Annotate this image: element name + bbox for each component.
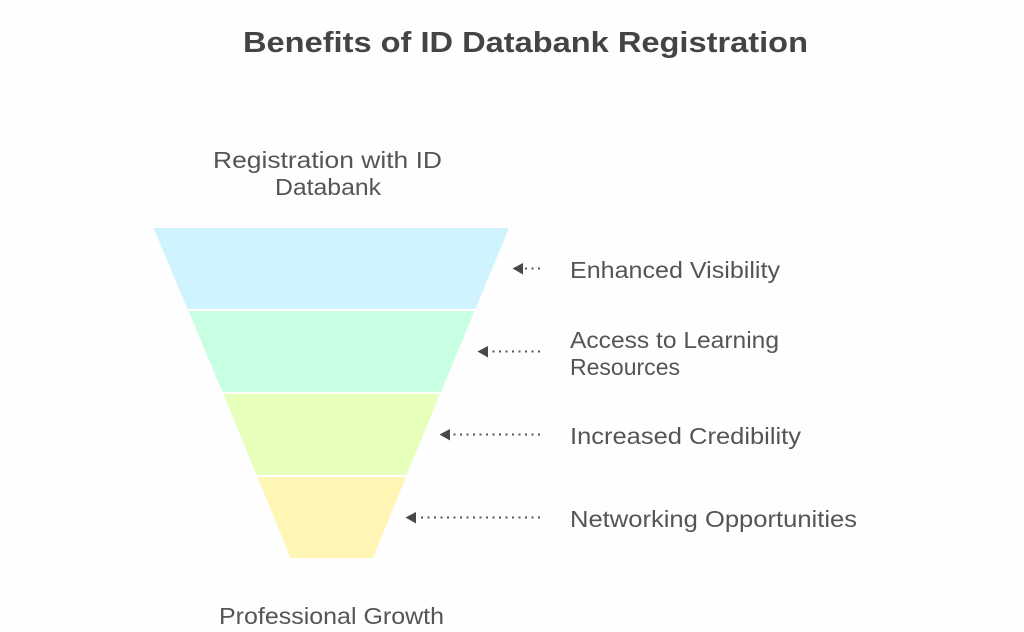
label: access to learning resources: Resources: [570, 354, 680, 380]
funnel tier 4: yellow: [258, 477, 406, 558]
label: networking opportunities: Networking Opportunities: [570, 506, 857, 532]
funnel tier 3: lime: [224, 394, 440, 475]
arrow: access to learning resources: [478, 346, 540, 358]
funnel top label: Registration with ID: [213, 147, 442, 173]
funnel top label: Databank: [275, 174, 382, 200]
funnel tier 2: green: [188, 311, 474, 392]
arrow: enhanced visibility: [512, 263, 540, 274]
label: access to learning resources: [570, 327, 779, 380]
label: increased credibility: Increased Credibility: [570, 423, 802, 449]
label: access to learning resources: Access to Learning: [570, 327, 779, 353]
arrow: networking opportunities: [406, 512, 540, 524]
label: enhanced visibility: Enhanced Visibility: [570, 257, 781, 283]
funnel tier 1: blue: [154, 228, 509, 309]
funnel top label: [213, 147, 442, 200]
title: Benefits of ID Databank Registration: [243, 27, 808, 59]
arrow: increased credibility: [440, 429, 540, 440]
funnel bottom label: Professional Growth: [219, 603, 444, 629]
funnel chart: [154, 228, 509, 558]
